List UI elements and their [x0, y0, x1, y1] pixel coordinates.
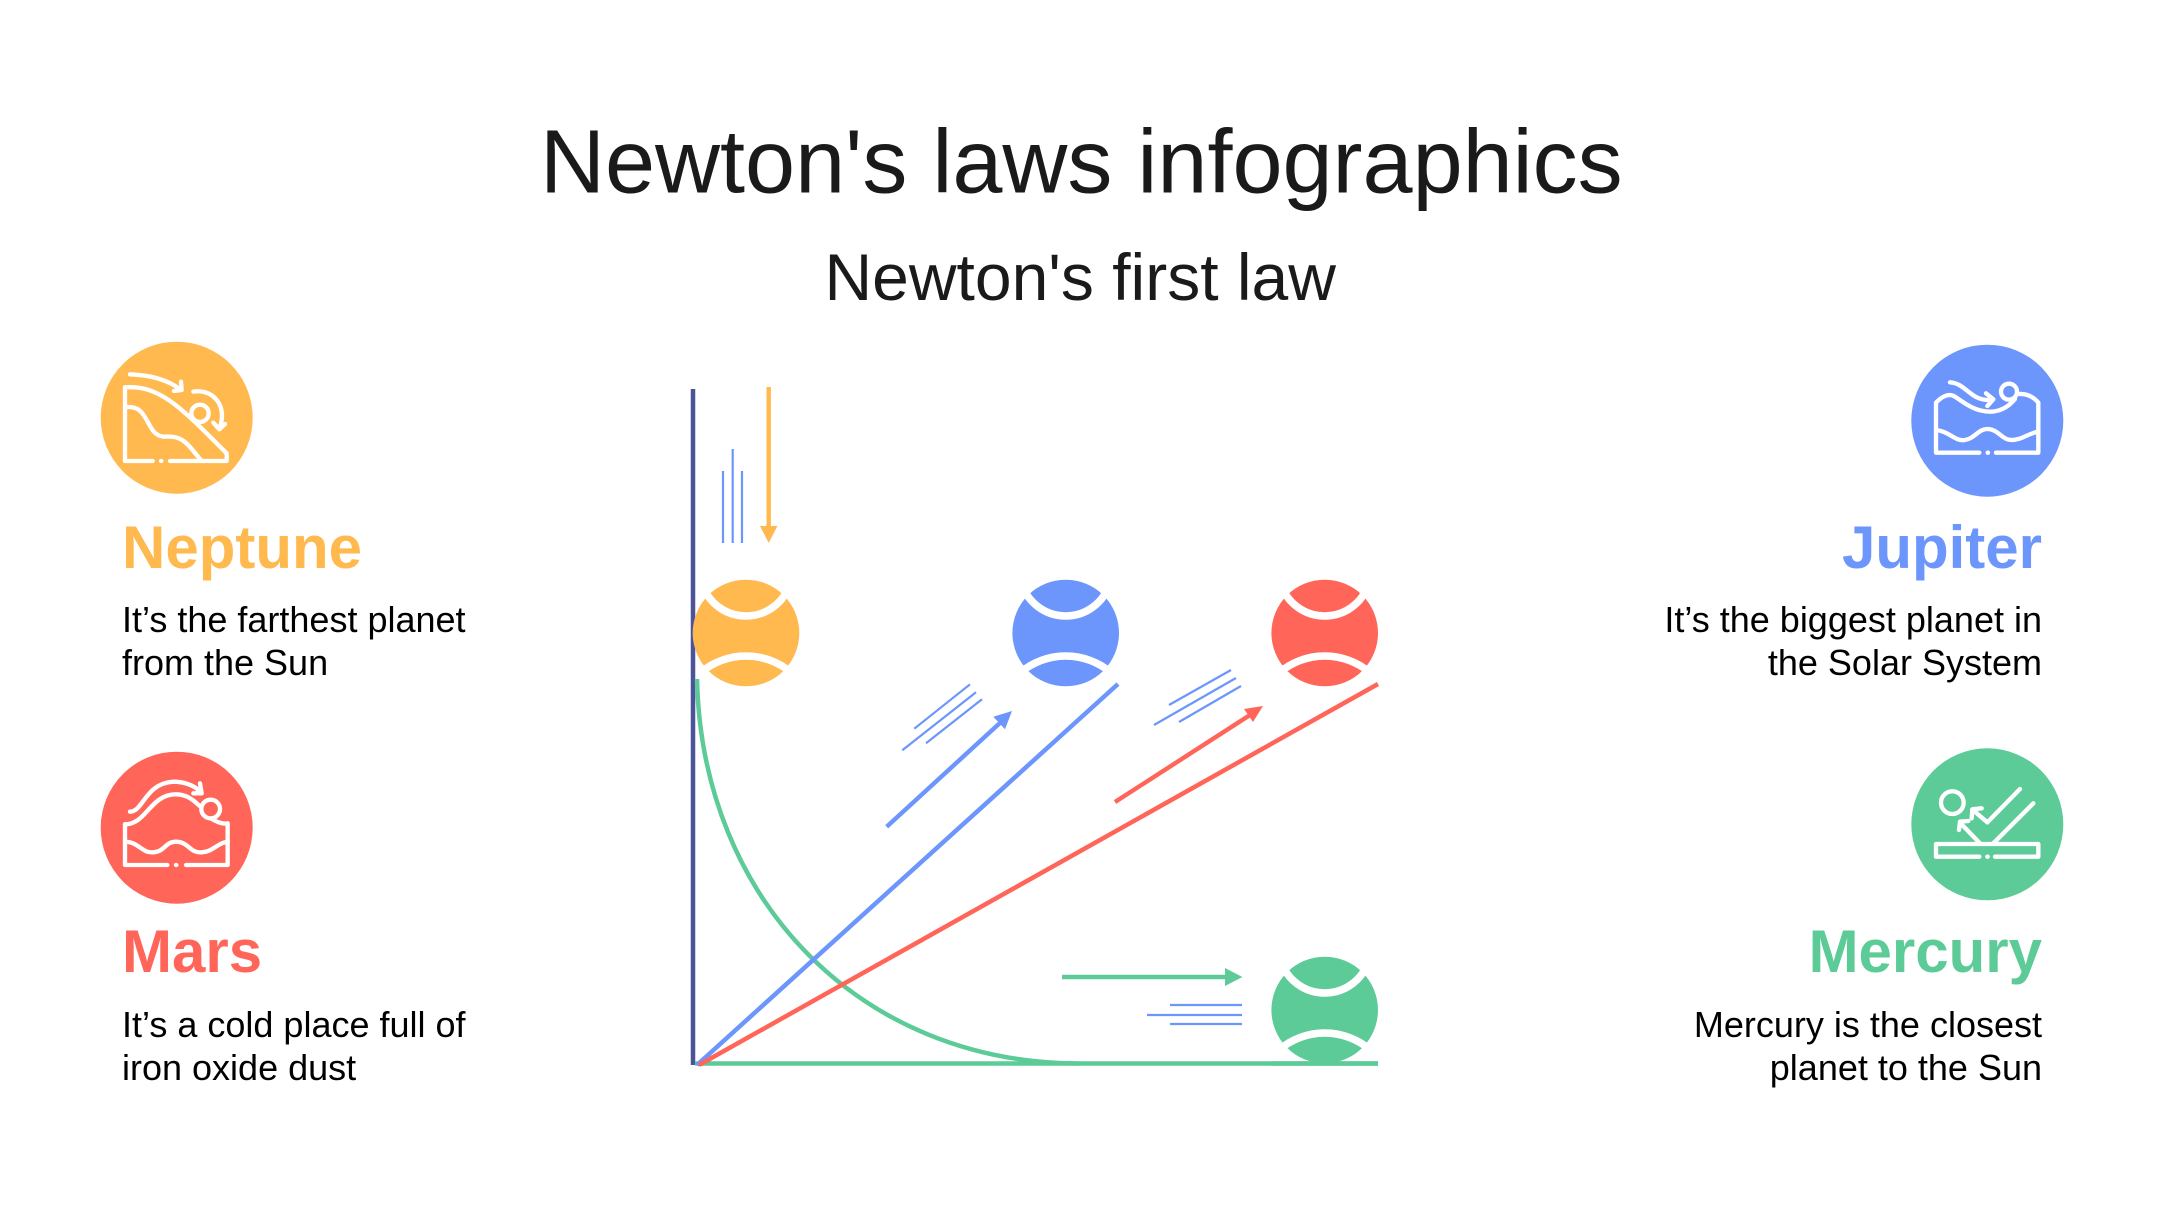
x axis	[695, 1061, 1378, 1066]
blue line	[697, 684, 1118, 1065]
icon: ball rolling down slope	[101, 342, 253, 494]
panel: Neptune	[101, 342, 466, 683]
heading: Mercury: Mercury	[1809, 918, 2043, 985]
text: Jupiter description: the Solar System	[1768, 642, 2042, 683]
text: Neptune description: It’s the farthest planet	[122, 599, 466, 640]
heading: Jupiter: Jupiter	[1842, 514, 2042, 581]
heading: Neptune: Neptune	[122, 514, 362, 581]
text: Mars description: iron oxide dust	[122, 1047, 356, 1088]
icon: ball rolling over hill	[101, 752, 253, 904]
icon: ball in valley	[1911, 345, 2063, 497]
arrow: blue diagonal	[887, 711, 1012, 827]
red line	[699, 684, 1378, 1065]
text: Mercury description: Mercury is the closest	[1694, 1004, 2042, 1045]
panel: Jupiter	[1664, 345, 2063, 683]
heading: Mars: Mars	[122, 918, 262, 985]
speed lines: orange ball	[723, 449, 742, 543]
text: Jupiter description: It’s the biggest planet in	[1664, 599, 2042, 640]
chart: velocity diagram	[693, 387, 1378, 1065]
y axis	[691, 389, 695, 1065]
speed lines: green ball	[1147, 1005, 1242, 1024]
green decay curve	[697, 679, 1079, 1064]
icon: ball bouncing off surface	[1911, 748, 2063, 900]
arrow: green right	[1062, 968, 1242, 986]
panel: Mars	[101, 752, 467, 1088]
panel: Mercury	[1694, 748, 2063, 1088]
arrow: orange down	[760, 387, 777, 543]
speed lines: red ball	[1154, 670, 1241, 725]
text: Mercury description: planet to the Sun	[1770, 1047, 2042, 1088]
subtitle: Newton's first law	[824, 240, 1336, 314]
arrow: red diagonal	[1115, 706, 1263, 802]
ball: red	[1271, 580, 1378, 686]
text: Neptune description: from the Sun	[122, 642, 328, 683]
ball: green	[1271, 957, 1378, 1064]
speed lines: blue ball	[902, 684, 982, 750]
ball: blue	[1012, 580, 1119, 686]
text: Mars description: It’s a cold place full of	[122, 1004, 467, 1045]
ball: orange	[693, 580, 799, 686]
title: Newton's laws infographics	[540, 112, 1623, 212]
